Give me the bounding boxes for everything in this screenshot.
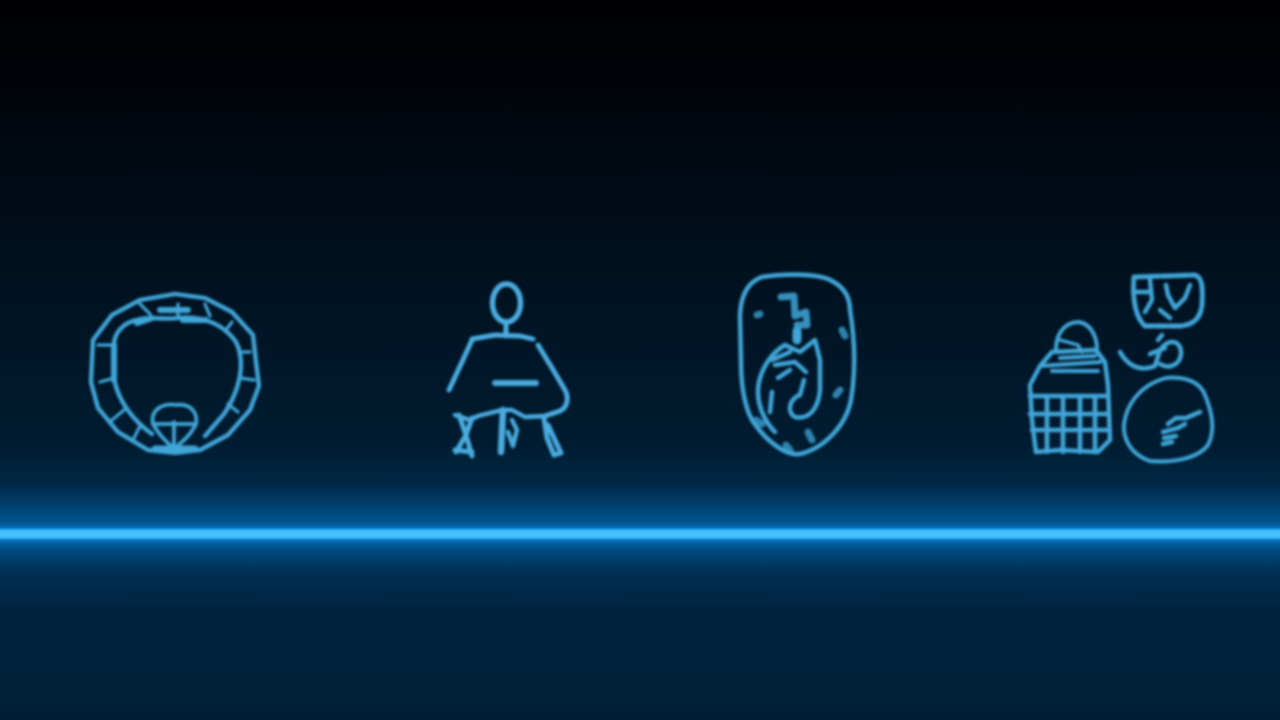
glowing horizontal line <box>0 525 1280 543</box>
round ball <box>1124 378 1212 461</box>
icon: computer mouse <box>740 275 854 454</box>
icon: ring <box>91 294 259 453</box>
icon: seated person <box>449 284 567 456</box>
icon: backpack, clock and ball group <box>1030 275 1212 461</box>
connector cord <box>1120 335 1181 368</box>
clock square <box>1133 275 1202 326</box>
backpack <box>1030 322 1110 452</box>
